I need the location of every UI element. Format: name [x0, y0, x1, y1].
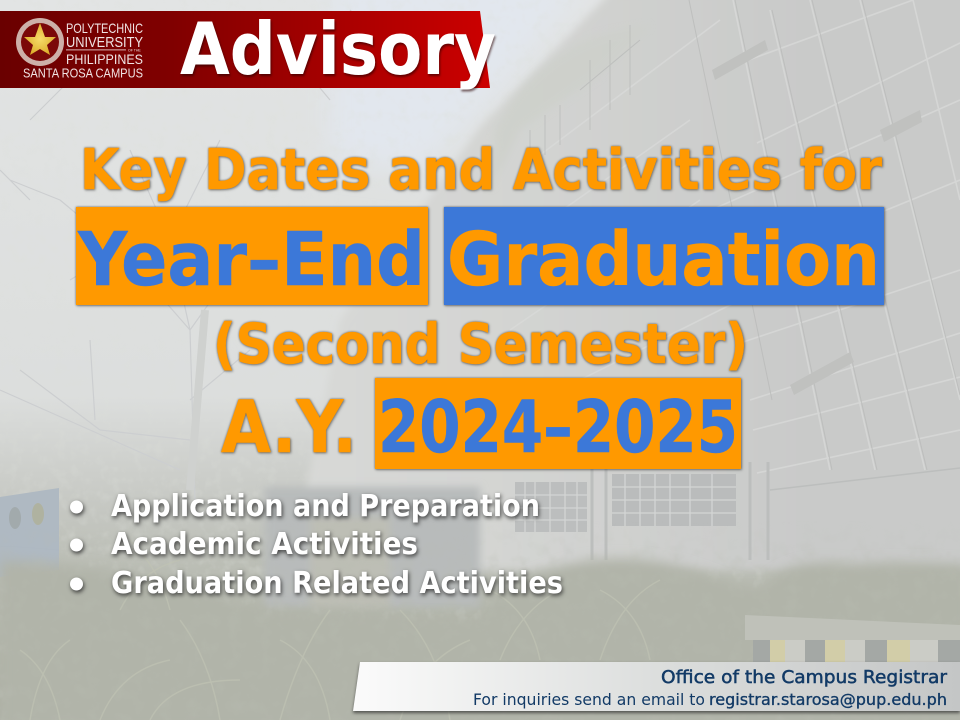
bullet: application and preparation: Application and Preparation: [111, 489, 540, 524]
year-end highlight: Year–End: [77, 217, 425, 303]
subtitle: second semester: (Second Semester): [213, 312, 748, 376]
bushes: [0, 559, 960, 720]
inquiry line: [473, 690, 947, 709]
lower building windows: [515, 462, 960, 560]
university name: SANTA ROSA CAMPUS: [23, 66, 143, 80]
curb and stripes: [745, 615, 960, 662]
tree foliage texture: [0, 0, 500, 480]
university name: [23, 20, 143, 80]
sky haze: [330, 0, 590, 170]
awning strips: [712, 40, 922, 395]
university name: PHILIPPINES: [66, 51, 143, 67]
footer panel: [353, 662, 960, 711]
university name: UNIVERSITY: [66, 35, 143, 51]
academic year highlight: 2024–2025: [378, 385, 738, 469]
icon: university seal: [16, 18, 64, 66]
bullet list: [70, 489, 563, 601]
bush texture: [0, 520, 960, 720]
monument: [265, 487, 480, 607]
university name: OF THE: [128, 48, 141, 52]
inquiry line: For inquiries send an email to: [473, 690, 705, 709]
darker window frame lines: [530, 0, 960, 470]
university name: POLYTECHNIC: [66, 20, 143, 36]
graduation highlight: Graduation: [447, 217, 880, 303]
tree branches: [0, 10, 400, 500]
foliage against building: [490, 25, 650, 190]
inquiry line: registrar.starosa@pup.edu.ph: [709, 690, 947, 709]
banner ribbon: [0, 11, 490, 88]
bullet: graduation related activities: Graduation Related Activities: [111, 566, 563, 601]
advisory banner: [0, 7, 496, 91]
advisory word: Advisory: [180, 7, 496, 91]
building facade: [290, 0, 960, 570]
office name: Office of the Campus Registrar: [661, 667, 948, 688]
bullet: academic activities: Academic Activities: [111, 527, 418, 562]
blue sign: [0, 488, 59, 660]
footer contact bar: [353, 662, 960, 711]
leaf strokes: [20, 540, 660, 720]
title line: key dates and activities: Key Dates and Activities for: [80, 138, 882, 203]
building window mullions: [500, 0, 960, 473]
academic year label: A.Y.: [221, 385, 357, 469]
